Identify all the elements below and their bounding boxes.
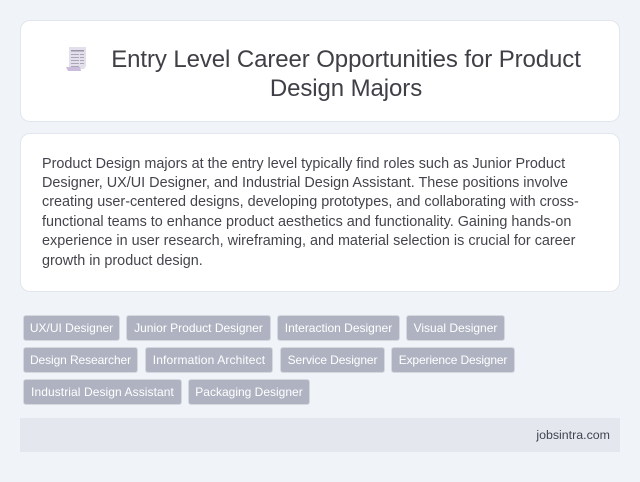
description text: Product Design majors at the entry level typically find roles such as Junior Product — [42, 156, 565, 172]
panel: title card — [20, 20, 620, 122]
description text: Designer, UX/UI Designer, and Industrial Design Assistant. These positions involve — [42, 175, 568, 191]
description text: creating user-centered designs, developing prototypes, and collaborating with cross- — [42, 194, 579, 210]
tag: UX/UI Designer: UX/UI Designer — [30, 321, 113, 335]
heading: Entry Level Career Opportunities for Product — [111, 46, 581, 72]
tag: Information Architect: Information Architect — [153, 353, 265, 367]
tag: Packaging Designer — [188, 379, 310, 405]
tag: Experience Designer — [391, 347, 515, 373]
tag: Industrial Design Assistant: Industrial Design Assistant — [31, 385, 174, 399]
icon: document scroll — [66, 47, 86, 71]
tag: Visual Designer: Visual Designer — [414, 321, 497, 335]
footer bar — [20, 418, 620, 452]
heading: Design Majors — [270, 74, 422, 102]
description text: growth in product design. — [42, 253, 203, 269]
tag: Industrial Design Assistant — [23, 379, 182, 405]
tag: UX/UI Designer — [23, 315, 120, 341]
tag: Junior Product Designer — [126, 315, 271, 341]
tag: Design Researcher — [23, 347, 138, 373]
tag: Junior Product Designer: Junior Product Designer — [134, 321, 263, 335]
heading — [111, 46, 581, 102]
tag: Interaction Designer: Interaction Designer — [285, 321, 392, 335]
tag: Design Researcher: Design Researcher — [30, 353, 131, 367]
tag: Service Designer — [280, 347, 385, 373]
tag list — [23, 315, 515, 405]
tag: Interaction Designer — [277, 315, 400, 341]
tag: Experience Designer: Experience Designer — [399, 353, 507, 367]
footer source label: jobsintra.com — [536, 428, 610, 442]
tag: Service Designer: Service Designer — [288, 353, 377, 367]
tag: Information Architect — [145, 347, 273, 373]
panel: description card — [20, 133, 620, 292]
description text: functional teams to enhance product aesthetics and functionality. Gaining hands-on — [42, 214, 571, 230]
description text: experience in user research, wireframing, and material selection is crucial for career — [42, 233, 575, 249]
tag: Packaging Designer: Packaging Designer — [195, 385, 303, 399]
tag: Visual Designer — [406, 315, 505, 341]
description text — [42, 156, 579, 269]
